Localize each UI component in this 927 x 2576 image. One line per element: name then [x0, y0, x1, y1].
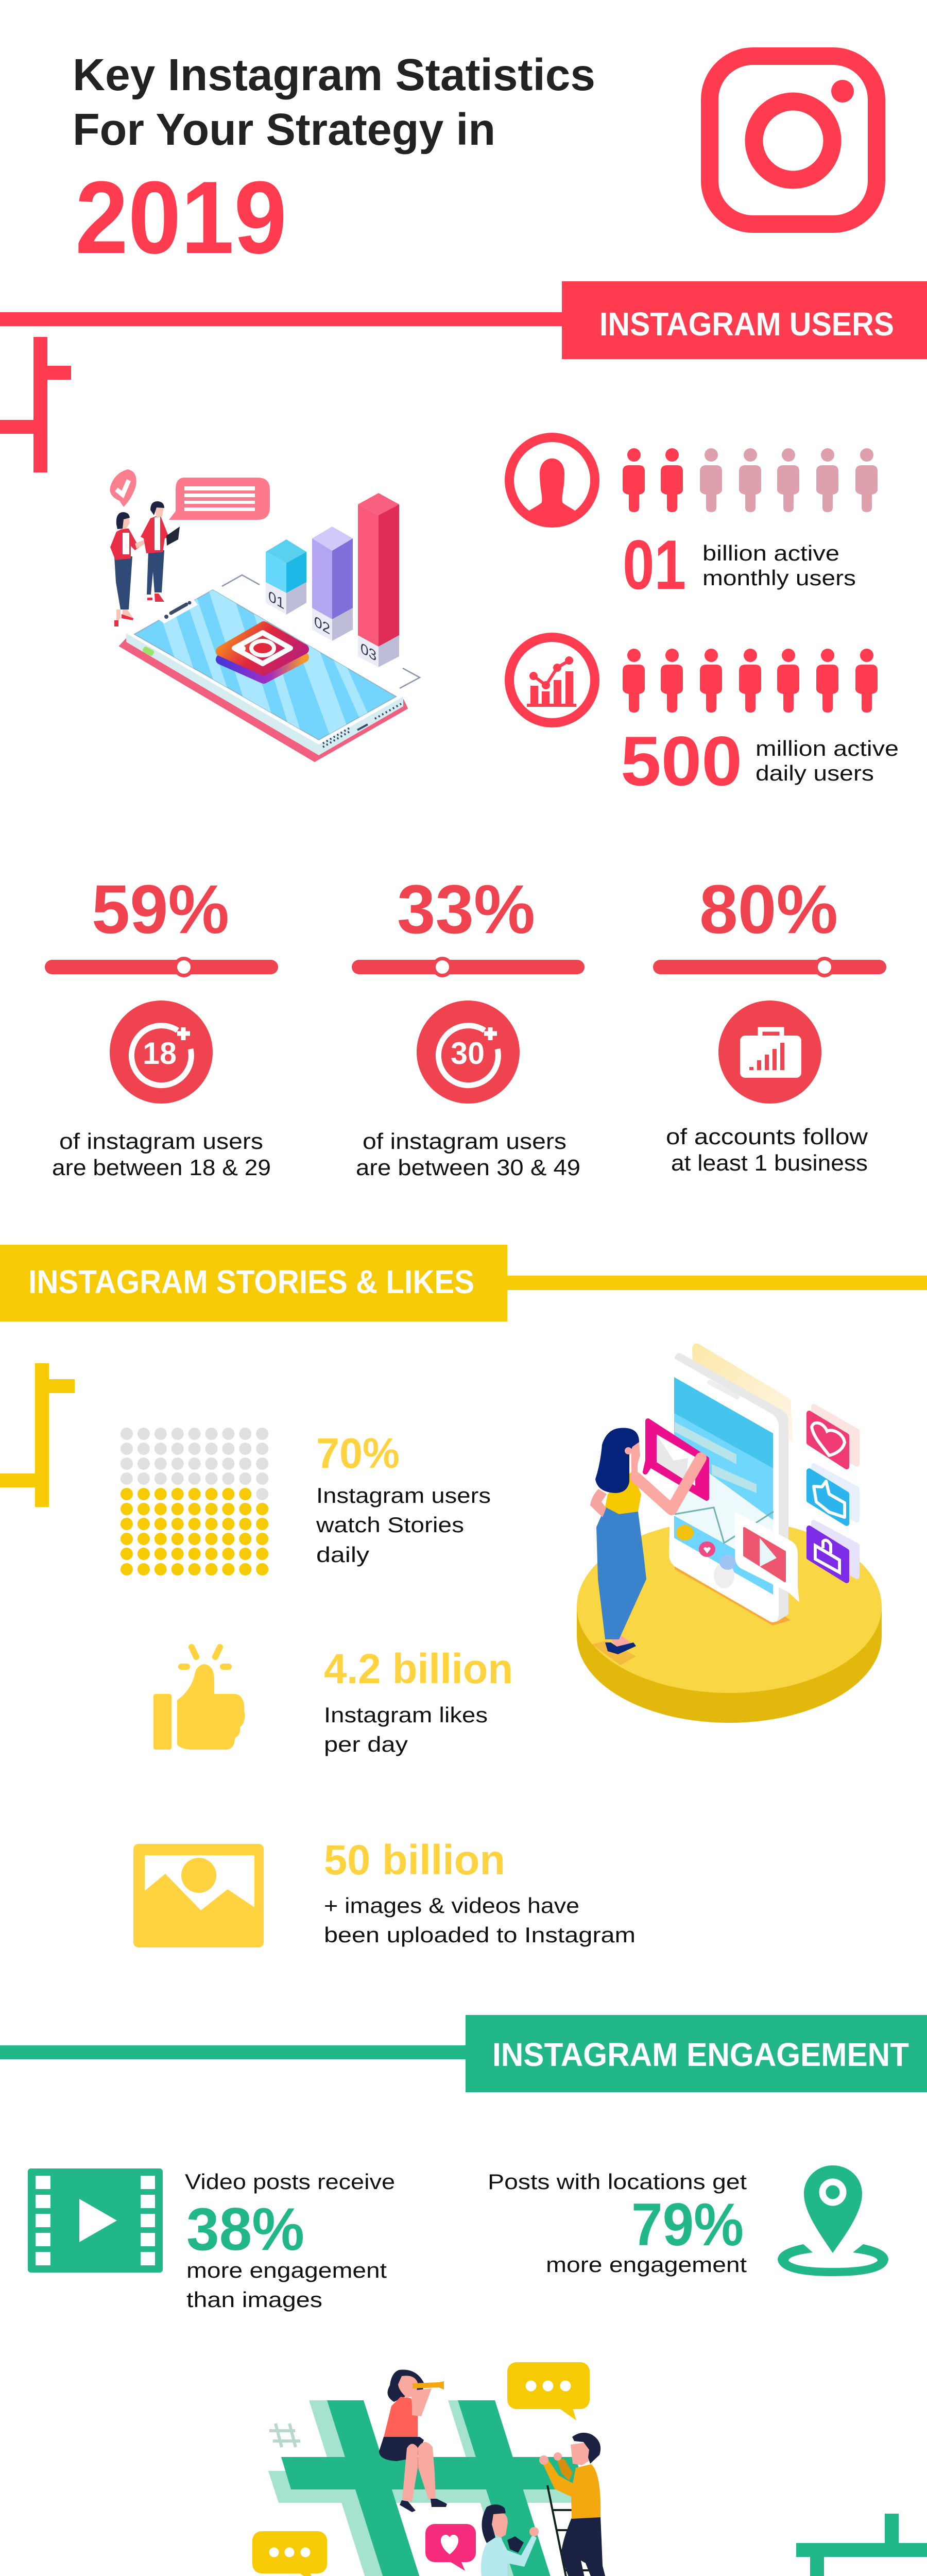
- title: For Your Strategy in: [73, 105, 495, 155]
- stat text: locations 79 percent: [488, 2170, 747, 2277]
- woman with telescope: [379, 2370, 447, 2512]
- bar 02: [312, 527, 353, 641]
- decorative T mark red: [0, 337, 71, 472]
- illustration: woman with phone on yellow disc: [577, 1343, 882, 1723]
- label: [702, 541, 856, 590]
- stat: 500 million daily users: [509, 637, 899, 800]
- stat: 1 billion monthly users: [509, 437, 878, 604]
- icon: thumbs up: [153, 1647, 245, 1750]
- icon: video film: [28, 2168, 163, 2273]
- phone: [669, 1343, 793, 1625]
- decorative T mark yellow: [0, 1363, 75, 1507]
- label: [666, 1124, 868, 1176]
- stat text: video posts 38 percent: than images: [186, 2287, 322, 2312]
- icon: 18 plus: [110, 1001, 213, 1104]
- stat text: 50 billion: 50 billion: [324, 1837, 505, 1884]
- person: woman: [110, 512, 150, 626]
- yellow chat bubble top: [507, 2362, 590, 2420]
- label: of accounts follow: [666, 1124, 868, 1149]
- icon: image yellow: [133, 1844, 264, 1947]
- illustration: phone with bar chart and people: [110, 469, 420, 761]
- stat text: locations 79 percent: more engagement: [546, 2252, 747, 2277]
- stat text: 50 billion: been uploaded to Instagram: [324, 1923, 636, 1947]
- pink message card: [645, 1421, 707, 1498]
- section header: instagram users: [0, 281, 927, 359]
- icon: 30 plus: [417, 1001, 520, 1104]
- people pictogram row: [623, 448, 683, 512]
- label: at least 1 business: [671, 1150, 868, 1176]
- icon: growth chart circle: [509, 637, 595, 723]
- decorative T mark green: [796, 2514, 927, 2576]
- stat text: 4.2 billion: per day: [324, 1732, 408, 1756]
- bar 01: 01: [268, 588, 284, 613]
- icon: user circle: [509, 437, 595, 531]
- social tiles: [809, 1406, 857, 1581]
- slider: [653, 957, 886, 977]
- stat text: locations 79 percent: 79%: [631, 2191, 744, 2258]
- woman standing: [478, 2504, 539, 2576]
- stat text: 70 percent: Instagram users: [316, 1483, 491, 1507]
- label: of instagram users: [59, 1129, 263, 1154]
- label: billion active: [702, 541, 839, 565]
- label: daily users: [756, 761, 874, 785]
- check bubble: [110, 469, 136, 507]
- stat text: video posts 38 percent: more engagement: [186, 2258, 387, 2282]
- small hashtag: [269, 2424, 300, 2447]
- stat text: video posts 38 percent: [185, 2170, 395, 2312]
- label: are between 18 & 29: [52, 1155, 271, 1180]
- section header: stories and likes: [0, 1245, 927, 1321]
- icon: business briefcase: [718, 1001, 821, 1104]
- stat text: 50 billion: [324, 1837, 636, 1947]
- stat: 59 percent: 59%: [92, 871, 229, 948]
- slider: [45, 957, 278, 977]
- bar 02: 02: [314, 613, 330, 638]
- stat text: 4.2 billion: 4.2 billion: [324, 1646, 513, 1692]
- stat: 80 percent: [653, 871, 886, 1176]
- bar 01: [266, 539, 306, 615]
- label: monthly users: [702, 566, 856, 590]
- woman: [590, 1428, 701, 1665]
- icon: instagram logo: [710, 56, 877, 224]
- icon: 30 plus: 30: [451, 1036, 485, 1071]
- slider: [352, 957, 585, 977]
- stat: 80 percent: 80%: [699, 871, 838, 948]
- number 500: 500: [621, 722, 742, 800]
- stat text: 70 percent: [316, 1429, 491, 1567]
- title: [73, 50, 595, 275]
- pink heart bubble: [425, 2524, 476, 2571]
- stat text: 50 billion: + images & videos have: [324, 1893, 579, 1918]
- icon: location pin: [778, 2165, 888, 2276]
- stat text: 70 percent: daily: [316, 1543, 369, 1567]
- dot chart: 70 percent: [127, 1434, 263, 1569]
- section header: instagram users: INSTAGRAM USERS: [599, 306, 894, 343]
- phone base: [119, 582, 407, 761]
- person: man: [141, 501, 180, 609]
- stat text: 70 percent: 70%: [316, 1429, 400, 1477]
- stat text: video posts 38 percent: 38%: [186, 2195, 304, 2263]
- stat text: 4.2 billion: [324, 1646, 513, 1756]
- brackets: [222, 575, 420, 688]
- section header: stories and likes: INSTAGRAM STORIES & LIKES: [28, 1263, 474, 1300]
- stat text: 4.2 billion: Instagram likes: [324, 1703, 488, 1727]
- yellow chat bubble lower: [252, 2531, 327, 2576]
- disc: [577, 1520, 882, 1723]
- stat text: 70 percent: watch Stories: [316, 1513, 464, 1537]
- section header: engagement: INSTAGRAM ENGAGEMENT: [492, 2036, 909, 2073]
- label: [52, 1129, 271, 1180]
- section header: engagement: [0, 2015, 927, 2092]
- stat text: video posts 38 percent: Video posts receive: [185, 2170, 395, 2194]
- main hashtag: [281, 2400, 630, 2576]
- man on ladder: [539, 2433, 613, 2576]
- instagram cube: [221, 626, 304, 679]
- stat: 33 percent: [352, 871, 585, 1180]
- light hashtag shadow: [268, 2400, 613, 2576]
- label: of instagram users: [363, 1129, 566, 1154]
- icon: 18 plus: 18: [143, 1036, 177, 1071]
- title: Key Instagram Statistics: [73, 50, 595, 100]
- bar 03: 03: [360, 640, 376, 665]
- stat: 33 percent: 33%: [397, 871, 535, 948]
- number 01: 01: [623, 526, 686, 604]
- stat text: locations 79 percent: Posts with locations get: [488, 2170, 747, 2194]
- speech bubble: [169, 478, 270, 520]
- stat: 59 percent: [45, 871, 278, 1180]
- people pictogram row: [623, 649, 878, 713]
- label: [356, 1129, 580, 1180]
- label: million active: [756, 736, 899, 760]
- label: [756, 736, 899, 785]
- label: are between 30 & 49: [356, 1155, 580, 1180]
- play bubble: [735, 1513, 799, 1602]
- ladder: [547, 2485, 621, 2576]
- illustration: hashtag with people: [252, 2362, 630, 2576]
- bar 03: [358, 493, 399, 667]
- title: 2019: [75, 160, 287, 275]
